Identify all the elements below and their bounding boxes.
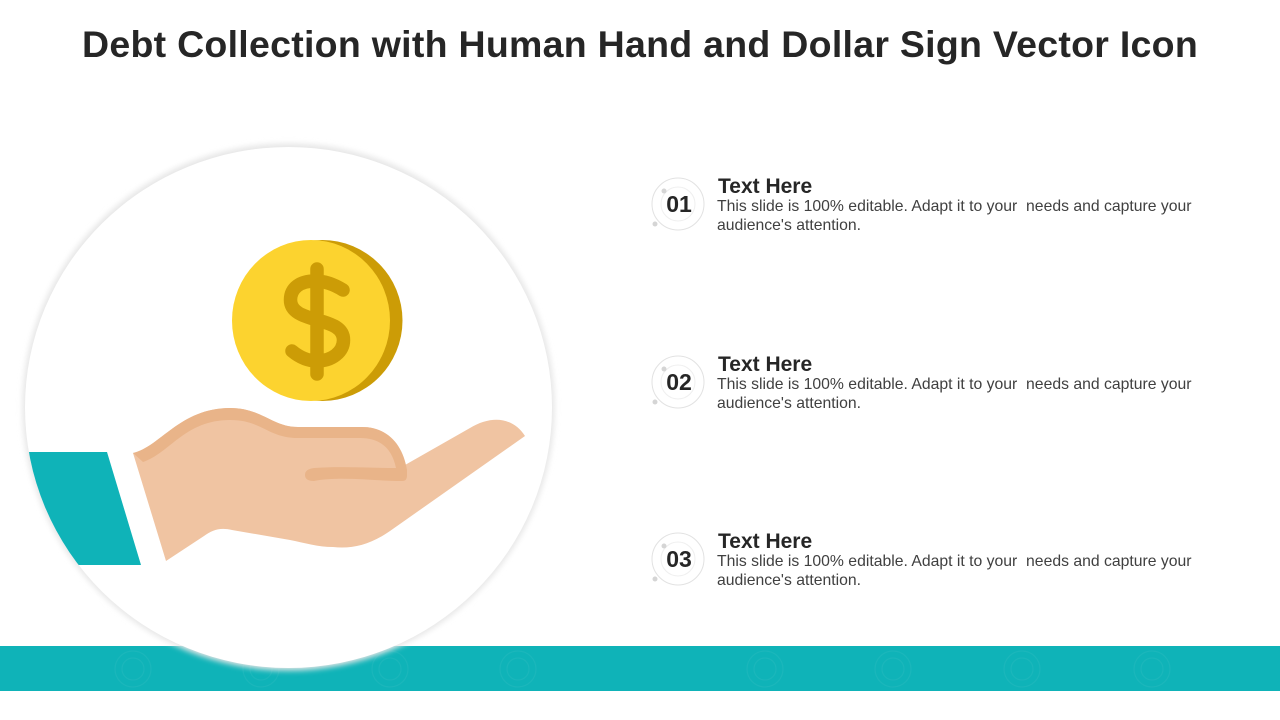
list item 03 [652,530,1192,589]
list item 02: audience's attention. [717,395,861,412]
list item 03: Text Here [718,530,812,553]
list item 02 [652,353,1192,412]
icon: sleeve cuff [20,452,141,565]
list item 01 [652,175,1192,234]
list item 01: Text Here [718,175,812,198]
badge 01: 01 [666,191,692,217]
icon: dollar coin [232,240,402,401]
list item 01: audience's attention. [717,217,861,234]
badge 01 [652,178,704,230]
list item 01: This slide is 100% editable. Adapt it to your needs and capture your [717,198,1192,215]
list item 02: This slide is 100% editable. Adapt it to your needs and capture your [717,376,1192,393]
teal footer band [0,646,1280,691]
title: Debt Collection with Human Hand and Dollar Sign Vector Icon [82,23,1198,65]
icon: hand [133,408,525,561]
circle backdrop [22,144,554,670]
badge 03: 03 [666,546,692,572]
badge 02 [652,356,704,408]
list item 03: This slide is 100% editable. Adapt it to your needs and capture your [717,553,1192,570]
badge 03 [652,532,704,586]
list item 03: audience's attention. [717,572,861,589]
badge 02: 02 [666,369,692,395]
list item 02: Text Here [718,353,812,376]
faint watermark icons in footer band [114,650,1170,688]
illustration: hand holding coin in circle [22,142,556,675]
